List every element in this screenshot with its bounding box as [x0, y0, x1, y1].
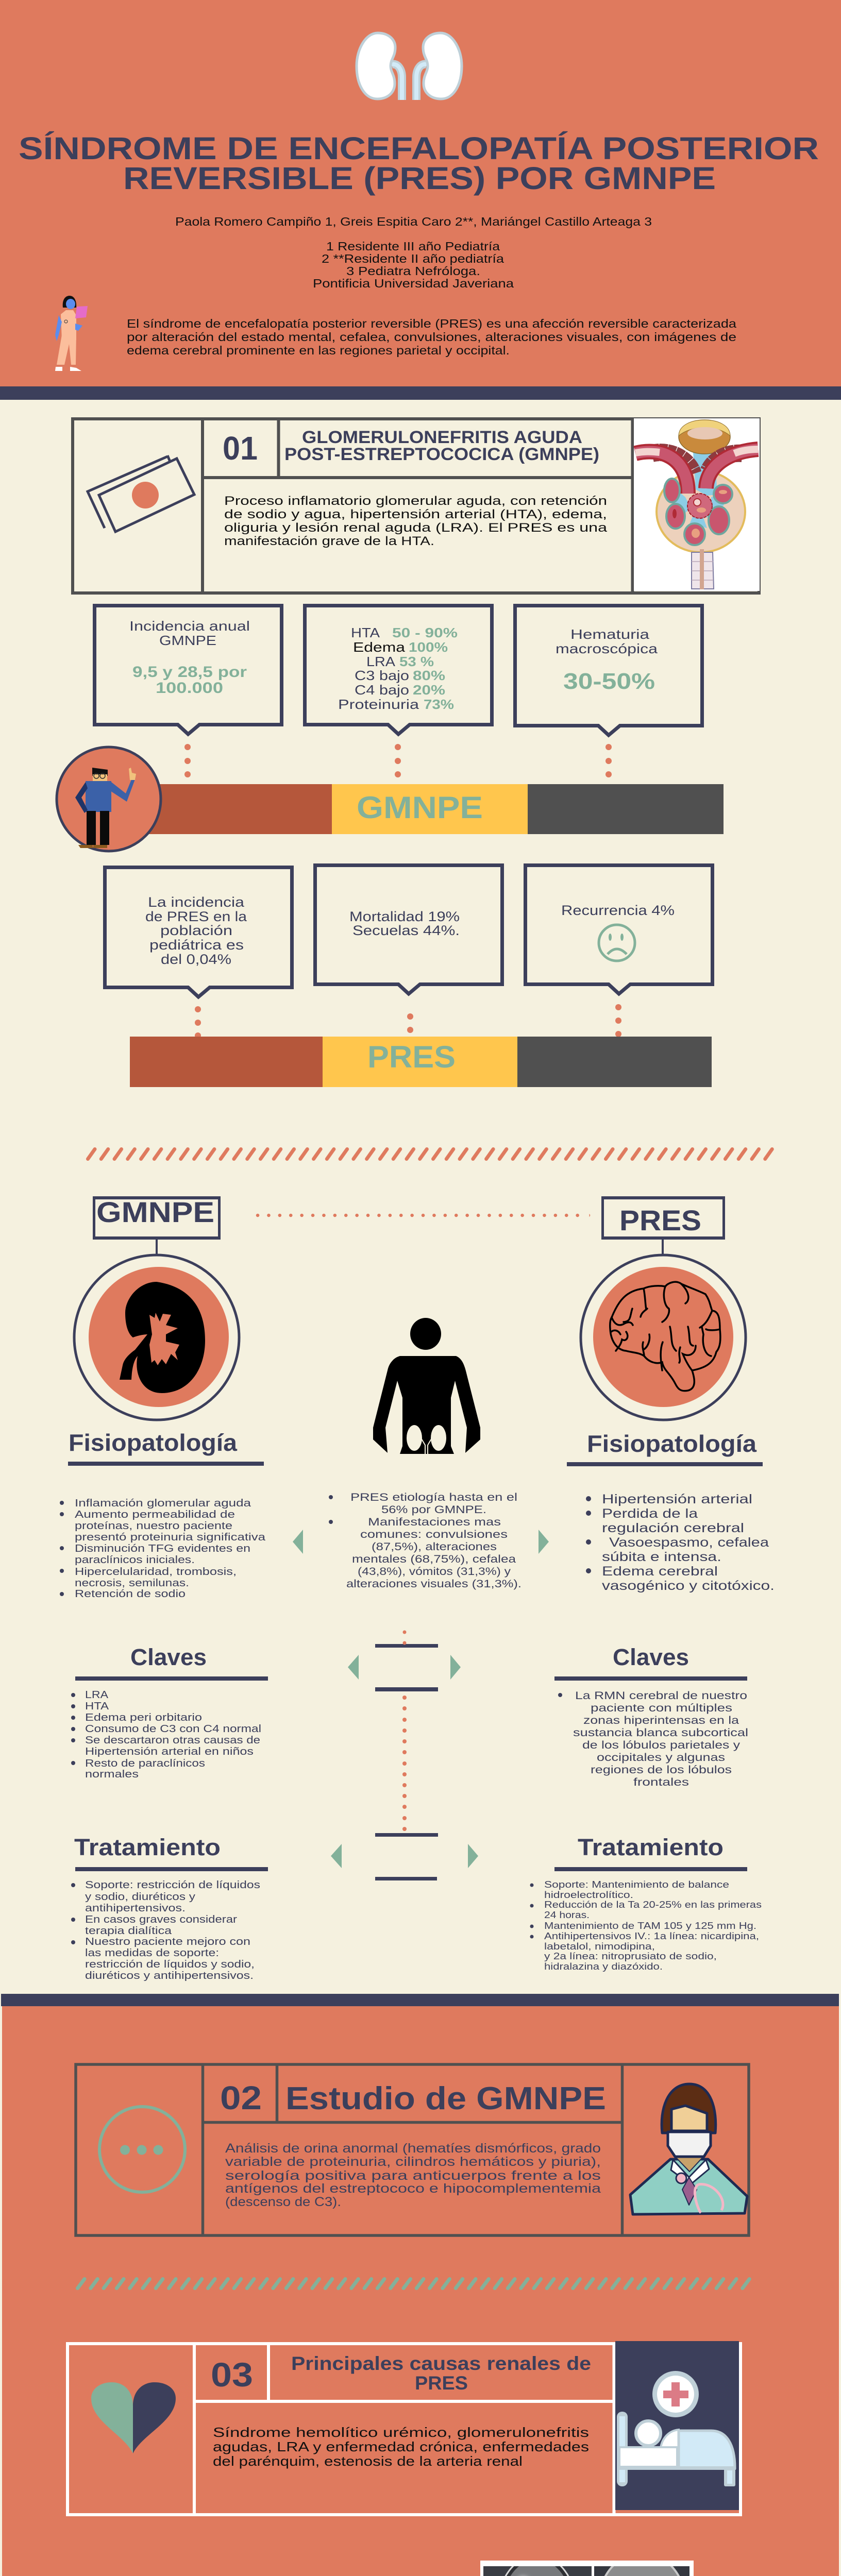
section heading: Estudio de GMNPE [285, 2081, 606, 2116]
section number 03: 03 [211, 2355, 253, 2394]
list: claves GMNPE: HTA [85, 1701, 109, 1712]
callout: hematuria: 30-50% [563, 669, 655, 694]
MRI A [483, 2566, 592, 2576]
section heading [291, 2353, 591, 2394]
outflow tubule [692, 552, 714, 589]
icon: heart [91, 2382, 176, 2453]
callout: recurrencia [526, 866, 712, 994]
intro text: por alteración del estado mental, cefalea, convulsiones, alteraciones visuales, con imágenes de [127, 330, 736, 344]
callout: incidencia: 100.000 [156, 680, 223, 697]
callouts: PRES stats [105, 866, 712, 1039]
body text: Síndrome hemolítico urémico, glomerulonefritis [213, 2425, 589, 2440]
list: tratamiento PRES: hidralazina y diazóxido. [544, 1961, 663, 1972]
callout: manifestaciones: Edema [353, 639, 406, 655]
list: fisiopatología GMNPE: Hipercelularidad, trombosis, [75, 1566, 237, 1578]
list: tratamiento GMNPE: y sodio, diuréticos y [85, 1891, 195, 1903]
capsule [657, 471, 745, 552]
heading: Tratamiento left: Tratamiento [74, 1834, 221, 1860]
callout: incidencia PRES: pediátrica es [149, 937, 244, 953]
body text: serología positiva para anticuerpos frente a los [225, 2168, 601, 2183]
list: fisiopatología PRES [586, 1492, 775, 1593]
heading: Tratamiento left [74, 1834, 268, 1871]
icon: sad face [599, 925, 635, 961]
list: central text: mentales (68,75%), cefalea [352, 1553, 516, 1565]
list: tratamiento GMNPE: En casos graves considerar [85, 1914, 237, 1925]
list: claves PRES: regiones de los lóbulos [591, 1764, 732, 1776]
callout: manifestaciones: C4 bajo [355, 682, 409, 698]
list: fisiopatología GMNPE: Disminución TFG evidentes en [75, 1543, 250, 1554]
section number 01: 01 [223, 430, 258, 467]
icon: nurse [55, 296, 88, 371]
section number 02: 02 [220, 2079, 262, 2116]
list: fisiopatología GMNPE: necrosis, semilunas. [75, 1578, 189, 1589]
panel frame [68, 2344, 741, 2515]
callout: hematuria: Hematuria [570, 626, 650, 642]
dotted link [258, 1214, 588, 1217]
panel: 01 glomerulonefritis [73, 418, 760, 593]
list: fisiopatología GMNPE [60, 1498, 266, 1600]
list: fisiopatología PRES: Edema cerebral [602, 1564, 718, 1579]
icon: doctor in circle [57, 747, 161, 851]
list: tratamiento GMNPE: diuréticos y antihipertensivos. [85, 1970, 254, 1981]
section heading [284, 428, 599, 464]
list: fisiopatología PRES: regulación cerebral [602, 1521, 744, 1535]
heading: Claves left: Claves [130, 1644, 207, 1670]
list: claves PRES [558, 1690, 748, 1788]
callout: manifestaciones: 50 - 90% [392, 625, 458, 640]
list: tratamiento PRES: hidroelectrolítico. [544, 1890, 633, 1900]
image: MRI panel [480, 2561, 694, 2576]
callout: mortalidad: Mortalidad 19% [349, 909, 460, 924]
list: claves PRES: occipitales y algunas [597, 1752, 725, 1764]
illustration: glomerulus [634, 418, 760, 591]
icon: brain circle [581, 1255, 746, 1420]
callout: incidencia PRES: de PRES en la [145, 909, 247, 924]
intro text: El síndrome de encefalopatía posterior reversible (PRES) es una afección reversible caracterizada [127, 317, 736, 330]
heading: Fisiopatología right: Fisiopatología [587, 1430, 756, 1457]
authors: 3 Pediatra Nefróloga. [346, 264, 480, 278]
authors: Pontificia Universidad Javeriana [313, 277, 514, 290]
callout: incidencia: GMNPE [159, 633, 216, 648]
list: central text: 56% por GMNPE. [381, 1504, 486, 1516]
list: claves PRES: La RMN cerebral de nuestro [575, 1690, 747, 1702]
authors: 1 Residente III año Pediatría [326, 240, 500, 253]
icon: person with kidneys [373, 1318, 480, 1454]
list: tratamiento GMNPE: Soporte: restricción de líquidos [85, 1879, 260, 1891]
label box PRES: PRES [619, 1204, 701, 1236]
list: central text: alteraciones visuales (31,3%). [346, 1578, 522, 1590]
list: fisiopatología GMNPE: presentó proteinuria significativa [75, 1532, 266, 1543]
section heading: POST-ESTREPTOCOCICA (GMNPE) [284, 445, 599, 464]
icon: chat bubble [99, 2107, 185, 2192]
list: claves PRES: sustancia blanca subcortical [573, 1727, 748, 1739]
header section [19, 33, 819, 371]
heading: Tratamiento right: Tratamiento [578, 1834, 724, 1860]
callout: recurrencia: Recurrencia 4% [561, 903, 675, 918]
bar: GMNPE: GMNPE [357, 790, 483, 825]
callout: manifestaciones: 53 % [399, 654, 434, 669]
list: claves GMNPE [71, 1689, 261, 1780]
list: fisiopatología PRES: Hipertensión arterial [602, 1492, 752, 1506]
callout: manifestaciones: Proteinuria [338, 697, 419, 712]
title [19, 131, 819, 196]
body text: agudas, LRA y enfermedad crónica, enfermedades [213, 2439, 589, 2454]
list: central text: comunes: convulsiones [360, 1529, 508, 1540]
heading: Claves right [554, 1644, 747, 1681]
body text: del parénquim, estenosis de la arteria renal [213, 2453, 523, 2469]
MRI B [594, 2566, 689, 2576]
icon: hospital bed [615, 2341, 739, 2510]
label box PRES [601, 1198, 725, 1256]
callout: manifestaciones [305, 606, 492, 734]
heading: Claves left [75, 1644, 268, 1681]
body text: variable de proteinuria, cilindros hemáticos y piuria), [225, 2155, 601, 2169]
body text: antígenos del estreptococo e hipocomplementemia [225, 2181, 601, 2196]
list: claves GMNPE: normales [85, 1769, 139, 1780]
callout: manifestaciones: 80% [413, 668, 445, 683]
panel: comparison GMNPE vs PRES [60, 1196, 775, 1981]
icon: doctor with mask [630, 2084, 747, 2214]
blue mesangium [693, 452, 717, 496]
right arteriole [709, 453, 742, 471]
list: fisiopatología GMNPE: paraclínicos iniciales. [75, 1554, 195, 1566]
callout: manifestaciones: 100% [409, 639, 448, 655]
callout: mortalidad: Secuelas 44%. [352, 923, 460, 938]
body text: Proceso inflamatorio glomerular aguda, con retención [224, 494, 607, 508]
title: SÍNDROME DE ENCEFALOPATÍA POSTERIOR [19, 131, 819, 166]
list: claves PRES: zonas hiperintensas en la [583, 1715, 739, 1726]
section heading: PRES [415, 2372, 468, 2394]
list: central text: PRES etiología hasta en el [350, 1492, 517, 1503]
panel: 03 principales causas [68, 2341, 741, 2515]
left arteriole [652, 452, 693, 474]
body text: (descenso de C3). [225, 2195, 341, 2209]
callout: hematuria: macroscópica [556, 641, 658, 656]
callout: incidencia PRES: del 0,04% [161, 952, 231, 967]
list: claves PRES: frontales [633, 1776, 689, 1788]
body text: de sodio y agua, hipertensión arterial (HTA), edema, [224, 507, 607, 521]
icon: kidney circle [74, 1255, 239, 1420]
list: tratamiento PRES: y 2a línea: nitroprusiato de sodio, [544, 1951, 717, 1961]
list: fisiopatología GMNPE: Aumento permeabilidad de [75, 1509, 235, 1520]
list: tratamiento PRES: 24 horas. [544, 1910, 590, 1920]
list: claves GMNPE: Se descartaron otras causas de [85, 1735, 260, 1746]
callout: manifestaciones: LRA [366, 654, 396, 669]
icon: kidneys [357, 33, 462, 100]
bar: PRES [130, 1037, 712, 1087]
bar: PRES: PRES [367, 1040, 456, 1074]
list: fisiopatología PRES: vasogénico y citotóxico. [602, 1579, 775, 1593]
intro text [127, 317, 736, 357]
list: tratamiento PRES: labetalol, nimodipina, [544, 1941, 655, 1952]
callout: manifestaciones: HTA [351, 625, 380, 640]
list: fisiopatología PRES: Perdida de la [602, 1506, 698, 1521]
list: tratamiento GMNPE: restricción de líquidos y sodio, [85, 1959, 255, 1970]
authors [175, 215, 652, 290]
panel frame [73, 419, 759, 593]
body text [225, 2141, 601, 2209]
list: claves PRES: paciente con múltiples [591, 1702, 732, 1714]
panel: 02 estudio de GMNPE [76, 2064, 749, 2235]
callout: incidencia [95, 606, 281, 734]
callout: incidencia: 9,5 y 28,5 por [132, 664, 247, 681]
body text: Análisis de orina anormal (hematíes dismórficos, grado [225, 2141, 601, 2156]
callout: manifestaciones: 73% [424, 697, 454, 712]
list: tratamiento GMNPE: Nuestro paciente mejoro con [85, 1936, 250, 1947]
list: fisiopatología PRES: súbita e intensa. [602, 1550, 721, 1564]
heading: Fisiopatología right [567, 1430, 763, 1466]
intro text: edema cerebral prominente en las regiones parietal y occipital. [127, 344, 510, 357]
list: claves GMNPE: Edema peri orbitario [85, 1712, 202, 1723]
list: central text [329, 1492, 522, 1590]
heading: Fisiopatología left [68, 1429, 264, 1466]
section heading: GLOMERULONEFRITIS AGUDA [302, 428, 582, 447]
list: claves GMNPE: Resto de paraclínicos [85, 1758, 205, 1769]
callout: manifestaciones: 20% [413, 682, 445, 698]
body text: manifestación grave de la HTA. [224, 534, 434, 548]
list: central text: (87,5%), alteraciones [372, 1541, 497, 1553]
icon: cards [88, 455, 194, 532]
dotted connectors [184, 744, 612, 777]
title: REVERSIBLE (PRES) POR GMNPE [123, 161, 716, 196]
list: central text: (43,8%), vómitos (31,3%) y [358, 1566, 511, 1578]
list: fisiopatología GMNPE: proteínas, nuestro paciente [75, 1520, 232, 1532]
list: tratamiento PRES: Antihipertensivos IV.: 1a línea: nicardipina, [544, 1931, 759, 1941]
callout: hematuria [515, 606, 702, 735]
authors: 2 **Residente II año pediatría [322, 252, 504, 265]
list: central text: Manifestaciones mas [368, 1516, 501, 1528]
callout: incidencia PRES: población [160, 923, 232, 938]
tubule ring [679, 420, 730, 454]
list: tratamiento PRES: Soporte: Mantenimiento de balance [544, 1879, 729, 1890]
body text [224, 494, 608, 548]
heading: Tratamiento right [554, 1834, 747, 1871]
list: tratamiento PRES: Reducción de la Ta 20-25% en las primeras [544, 1900, 762, 1910]
section heading: Principales causas renales de [291, 2353, 591, 2374]
body text [213, 2425, 589, 2469]
callout: incidencia: Incidencia anual [129, 618, 250, 634]
panel frame [76, 2064, 749, 2235]
list: tratamiento GMNPE: las medidas de soporte: [85, 1947, 219, 1959]
list: fisiopatología GMNPE: Inflamación glomerular aguda [75, 1498, 251, 1509]
callout: manifestaciones: C3 bajo [355, 668, 409, 683]
callout: incidencia PRES [105, 868, 292, 997]
capillary lobes [664, 479, 732, 545]
dotted connectors [195, 1004, 621, 1039]
list: tratamiento GMNPE [71, 1879, 260, 1981]
authors: Paola Romero Campiño 1, Greis Espitia Caro 2**, Mariángel Castillo Arteaga 3 [175, 215, 652, 228]
callout: incidencia PRES: La incidencia [148, 894, 245, 910]
central connectors [293, 1530, 549, 1880]
bar: GMNPE [136, 784, 724, 834]
callout: mortalidad [315, 866, 502, 994]
list: fisiopatología GMNPE: Retención de sodio [75, 1588, 186, 1600]
heading: Fisiopatología left: Fisiopatología [69, 1429, 237, 1456]
list: tratamiento GMNPE: terapia dialítica [85, 1925, 172, 1937]
list: tratamiento PRES [530, 1879, 762, 1972]
list: tratamiento GMNPE: antihipertensivos. [85, 1903, 186, 1914]
list: claves GMNPE: Consumo de C3 con C4 normal [85, 1723, 261, 1735]
heading: Claves right: Claves [613, 1644, 689, 1670]
list: claves GMNPE: Hipertensión arterial en niños [85, 1746, 254, 1757]
callouts: GMNPE stats [95, 606, 702, 777]
list: tratamiento PRES: Mantenimiento de TAM 105 y 125 mm Hg. [544, 1921, 756, 1931]
label box GMNPE [93, 1196, 221, 1256]
list: claves PRES: de los lóbulos parietales y [582, 1739, 741, 1751]
list: fisiopatología PRES: Vasoespasmo, cefalea [609, 1535, 769, 1550]
body text: oliguria y lesión renal aguda (LRA). El PRES es una [224, 521, 608, 535]
label box GMNPE: GMNPE [96, 1196, 214, 1228]
list: claves GMNPE: LRA [85, 1689, 109, 1701]
